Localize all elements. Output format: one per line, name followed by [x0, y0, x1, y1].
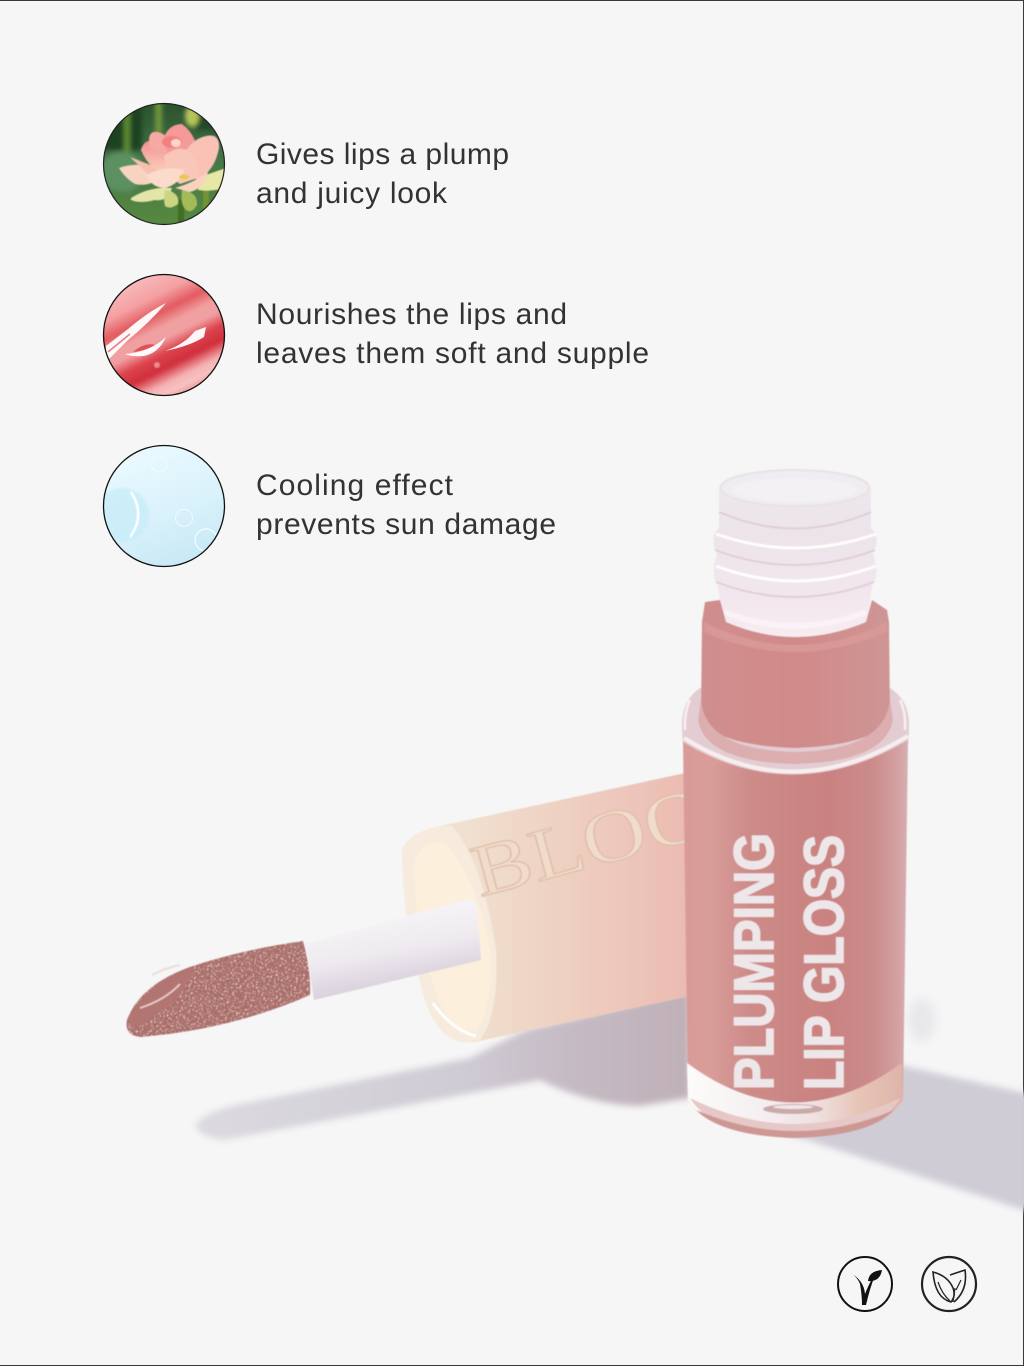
label text: LIP GLOSS: [792, 835, 855, 1090]
panel: benefits list: [95, 100, 649, 570]
cap lettering: BLOOM: [463, 751, 793, 913]
product: lip gloss tube: [682, 470, 909, 1138]
text: benefit three: Cooling effect: [256, 469, 454, 502]
text: benefit one: and juicy look: [256, 177, 448, 210]
clear collar: [682, 688, 909, 780]
text: benefit two: leaves them soft and supple: [256, 337, 649, 370]
icon: lotus flower: [102, 102, 226, 226]
cap: [402, 773, 687, 1042]
icon: gloss swatch: [102, 274, 226, 396]
product shadows: [195, 990, 1024, 1212]
wand: [306, 900, 481, 1000]
applicator tip: [127, 941, 310, 1037]
product: lip gloss applicator and cap: [126, 773, 687, 1042]
icon: leaf badge: [922, 1257, 976, 1311]
icon: water droplets: [102, 444, 226, 568]
text: benefit two: Nourishes the lips and: [256, 298, 567, 331]
tube body: [683, 740, 908, 1138]
tube base: [687, 1063, 903, 1138]
label text: PLUMPING: [722, 833, 785, 1090]
neck: [701, 600, 890, 748]
text: benefit three: prevents sun damage: [256, 508, 556, 541]
inner plug: [713, 470, 877, 648]
text: benefit one: Gives lips a plump: [256, 138, 509, 171]
icon: vegan badge: [838, 1257, 892, 1311]
label text: [722, 833, 855, 1090]
